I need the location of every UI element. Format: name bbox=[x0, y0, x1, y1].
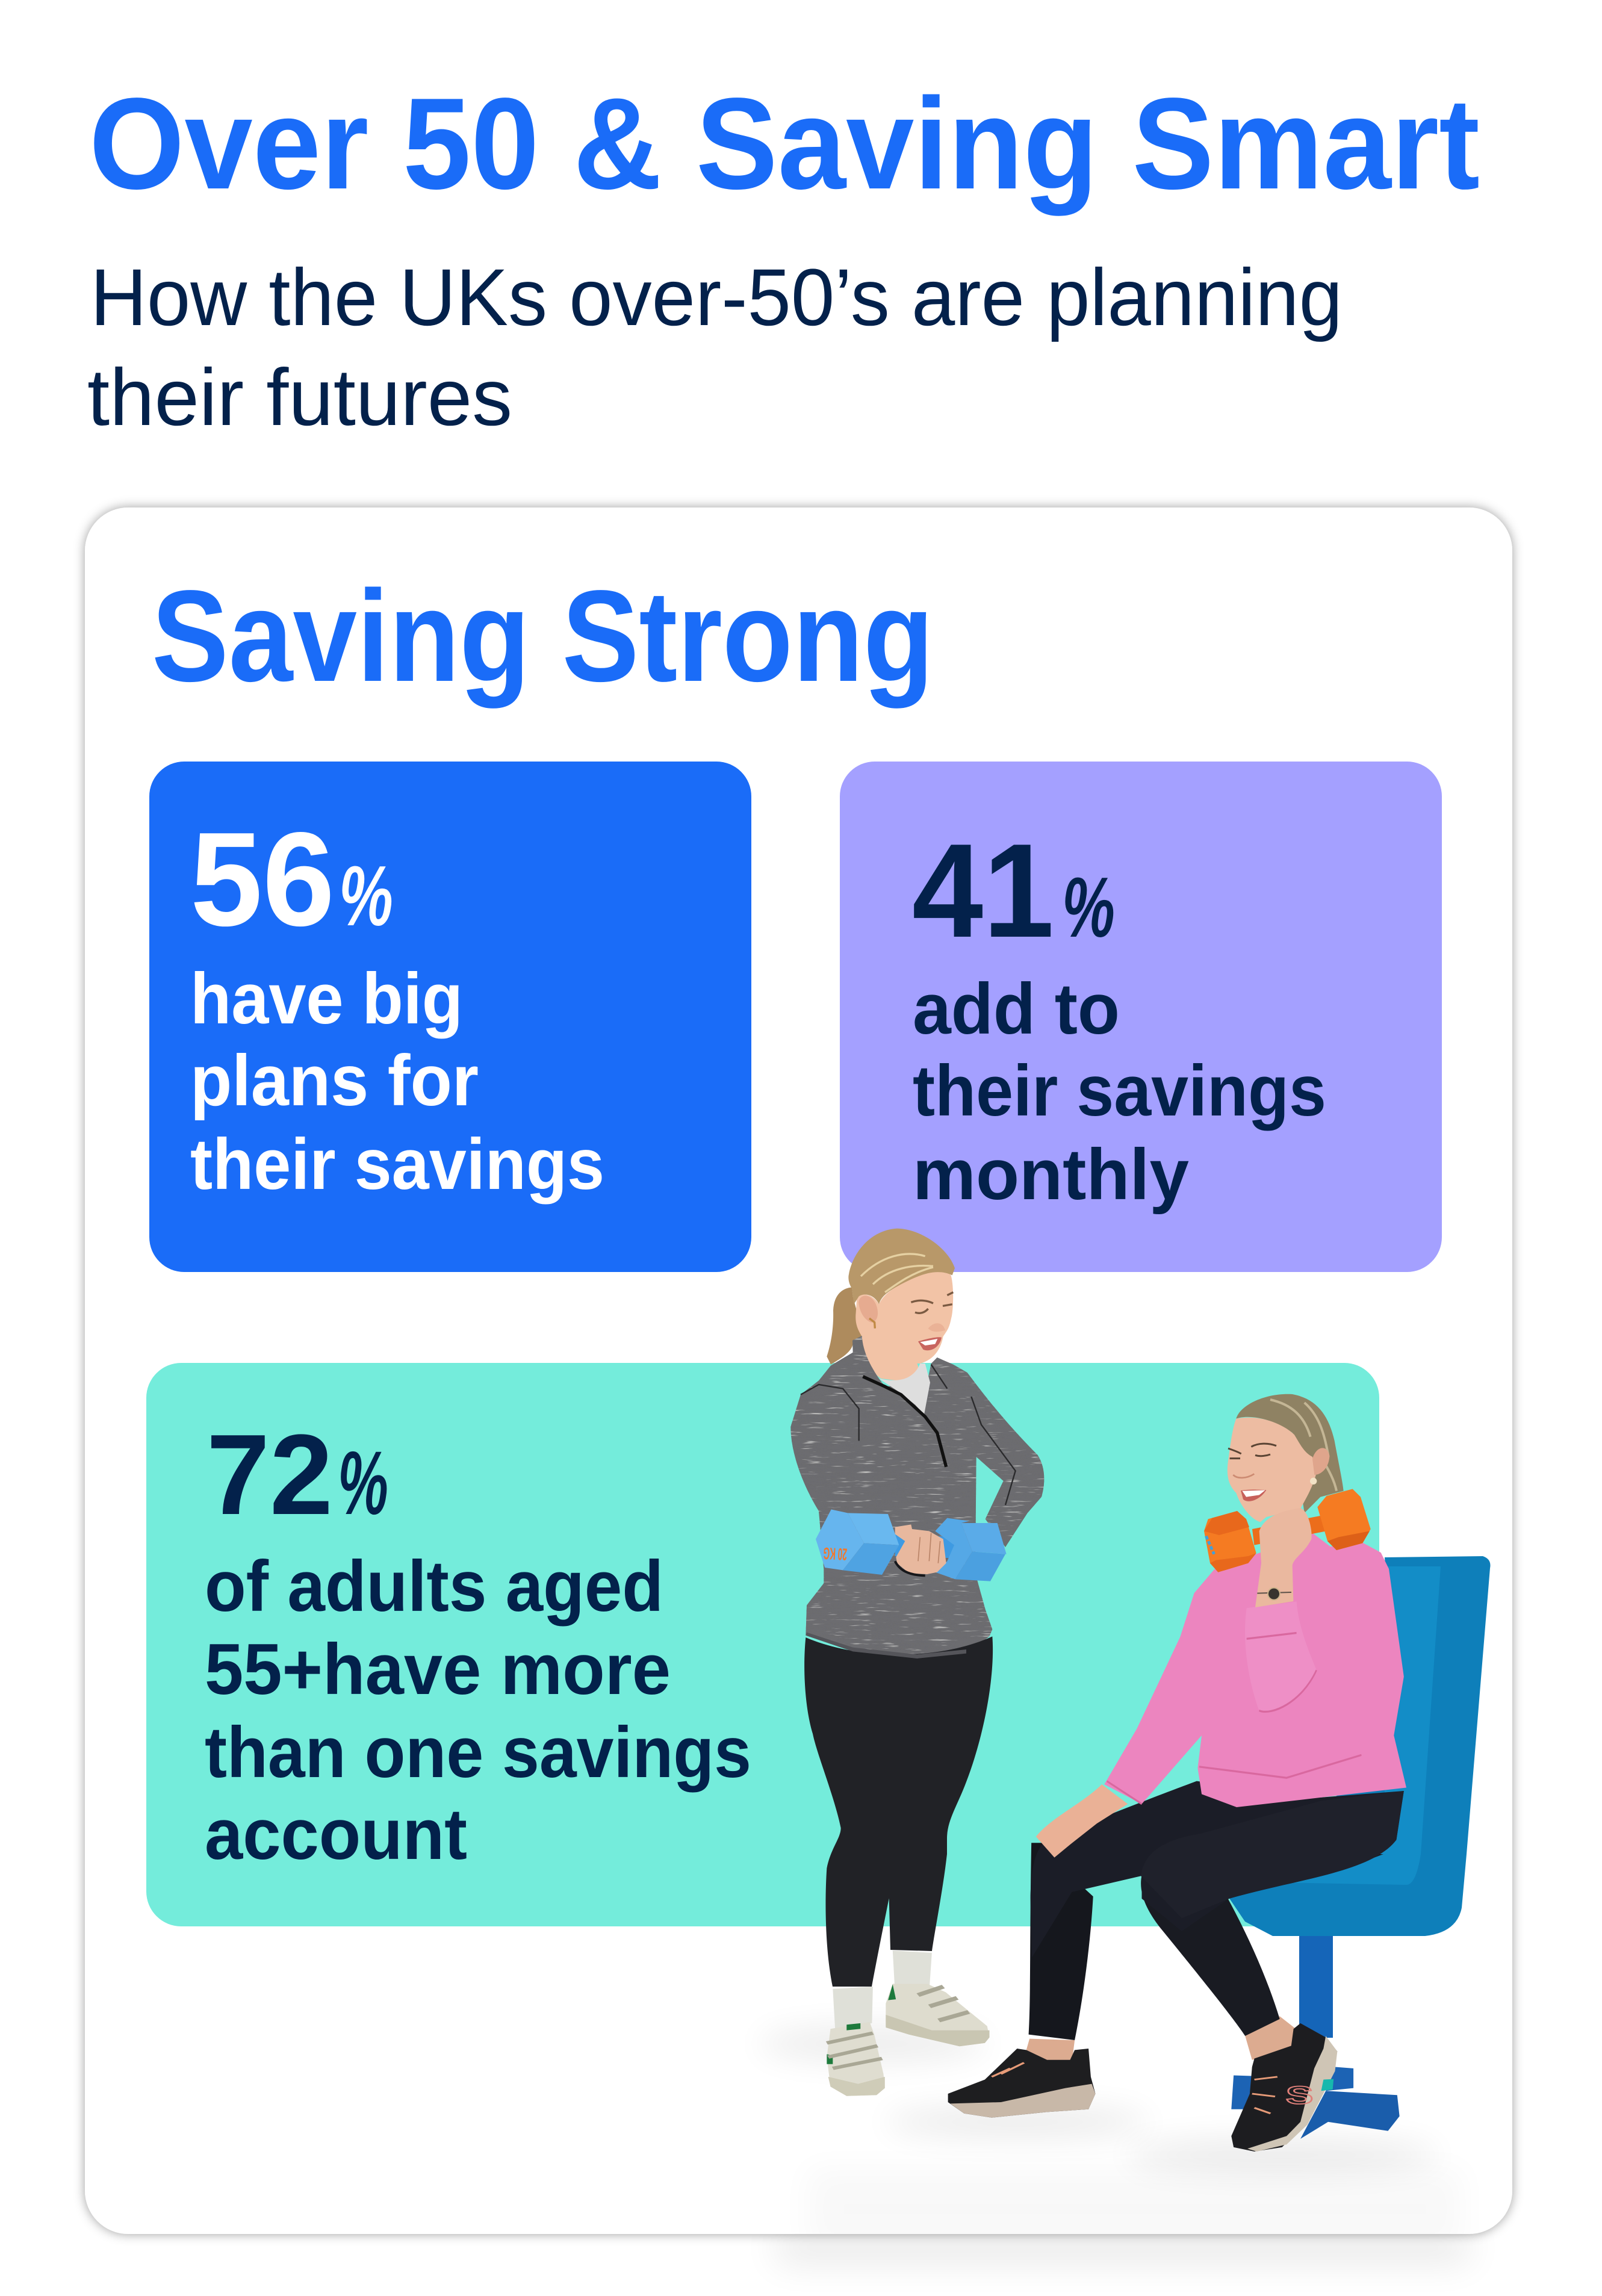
white trainers and socks bbox=[827, 1950, 990, 2096]
text: have big plans: have big bbox=[190, 958, 463, 1039]
dumbbell handle bbox=[1252, 1515, 1326, 1545]
right shoe bbox=[1231, 2023, 1337, 2152]
stat: 56%: % bbox=[339, 848, 393, 944]
face bbox=[1228, 1418, 1317, 1522]
chair shell bbox=[1229, 1556, 1491, 1936]
text: add to savings monthly: their savings bbox=[913, 1050, 1326, 1131]
stat: 72% bbox=[206, 1411, 388, 1539]
text: adults aged 55+: of adults aged bbox=[205, 1546, 663, 1627]
near shin bbox=[1029, 1843, 1149, 2040]
stat: 41%: 41 bbox=[912, 816, 1054, 966]
blue dumbbell bbox=[816, 1509, 1007, 1581]
watch bbox=[1257, 1588, 1291, 1600]
stat: 41%: % bbox=[1062, 860, 1115, 955]
earrings bbox=[869, 1318, 875, 1329]
trainer upper body bbox=[790, 1229, 1044, 1658]
heading: saving strong: Saving Strong bbox=[152, 563, 934, 709]
stat: 56%: 56 bbox=[190, 805, 335, 954]
head, dumbbell and raised arm bbox=[1204, 1394, 1371, 1607]
smile bbox=[1241, 1489, 1266, 1501]
facial features bbox=[911, 1292, 953, 1313]
hair bbox=[1236, 1394, 1344, 1513]
standing woman bbox=[790, 1229, 1044, 2096]
left shoe bbox=[948, 2049, 1096, 2118]
text: have big plans bbox=[190, 958, 604, 1205]
pearl earring bbox=[1310, 1478, 1317, 1485]
thighs and torso bbox=[1031, 1533, 1406, 1958]
subtitle bbox=[87, 253, 1343, 442]
leggings bbox=[804, 1633, 993, 1987]
floor shadows bbox=[759, 2026, 1463, 2251]
orange dumbbell right bbox=[1317, 1489, 1371, 1550]
stat: 72%: 72 bbox=[206, 1411, 333, 1539]
text: have big plans: plans for bbox=[190, 1040, 479, 1121]
orange dumbbell left bbox=[1204, 1511, 1256, 1572]
quarter-zip top bbox=[790, 1336, 1044, 1658]
blue dumbbell: 20 KG bbox=[823, 1544, 848, 1564]
thighs bbox=[1031, 1781, 1404, 1958]
eyes and brows bbox=[1228, 1444, 1276, 1459]
zip and seams bbox=[863, 1377, 946, 1467]
far shin bbox=[1141, 1854, 1383, 2036]
ankles bbox=[1026, 2016, 1300, 2067]
legs and shoes: S bbox=[1286, 2081, 1314, 2109]
text: adults aged 55+: than one savings bbox=[205, 1712, 751, 1793]
panel: 41% stat bbox=[840, 762, 1442, 1272]
subtitle: their futures bbox=[87, 353, 512, 442]
text: add to savings monthly: add to bbox=[913, 969, 1120, 1049]
ear bbox=[1312, 1448, 1329, 1475]
chair base bbox=[1231, 2067, 1400, 2139]
chair inner face bbox=[1273, 1566, 1441, 1885]
subtitle: How the UKs over-50’s are planning bbox=[90, 253, 1343, 343]
seated woman bbox=[948, 1394, 1406, 2152]
text: have big plans: their savings bbox=[190, 1124, 604, 1205]
panel: 72% stat bbox=[146, 1363, 1379, 1926]
text: adults aged 55+: account bbox=[205, 1794, 467, 1875]
text: adults aged 55+ bbox=[205, 1546, 751, 1875]
hand and forearm bbox=[1255, 1508, 1312, 1607]
chair bbox=[1229, 1556, 1491, 2139]
text: add to savings monthly bbox=[913, 969, 1326, 1215]
hand bbox=[895, 1524, 946, 1574]
legs and shoes bbox=[948, 1843, 1383, 2152]
stat: 72%: % bbox=[338, 1432, 388, 1533]
white tee bbox=[879, 1364, 930, 1415]
text: add to savings monthly: monthly bbox=[913, 1134, 1189, 1215]
card ground shadow bbox=[777, 2232, 1469, 2262]
chair post bbox=[1299, 1932, 1333, 2038]
pink sweatshirt bbox=[1104, 1533, 1406, 1807]
hair bbox=[848, 1229, 955, 1305]
ponytail bbox=[827, 1287, 863, 1365]
text: adults aged 55+: 55+have more bbox=[205, 1629, 671, 1710]
hand on knee bbox=[1036, 1784, 1128, 1858]
ear bbox=[858, 1295, 878, 1323]
panel: saving strong card bbox=[85, 507, 1512, 2234]
face and neck bbox=[855, 1271, 953, 1382]
title: Over 50 & Saving Smart bbox=[89, 70, 1480, 216]
panel: 56% stat bbox=[149, 762, 751, 1272]
